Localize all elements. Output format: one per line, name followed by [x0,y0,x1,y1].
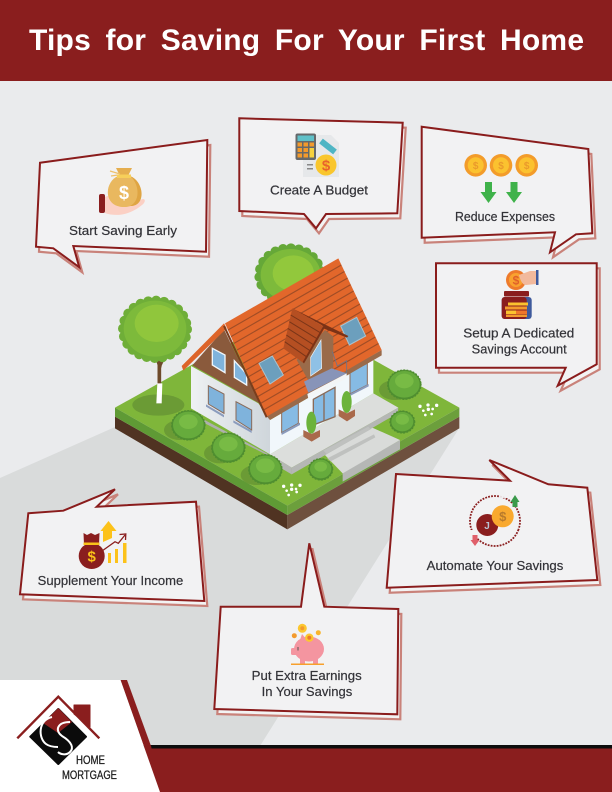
label [252,669,362,699]
label: Automate Your Savings [427,559,563,573]
icon: money bag and growth chart: $ [88,548,97,566]
ground block [115,312,459,529]
callout: start saving early [36,140,210,272]
icon: coins and down arrows [464,154,538,203]
house ground shadow [0,427,458,746]
icon: coins and down arrows: $ [498,161,504,172]
logo mark [17,697,99,764]
icon: money bag in hand: $ [119,183,129,203]
skylights [259,317,366,384]
callout: supplement your income [20,489,207,606]
wall windows [206,348,369,435]
icon: coins and down arrows: $ [473,161,479,172]
house illustration [115,248,459,529]
patio [198,393,398,474]
callout: reduce expenses [422,127,595,257]
icon: automation cycle: $ [499,509,507,524]
logo panel [0,680,160,792]
callout: dedicated savings account [436,263,600,391]
dormer [283,308,348,399]
callout: automate your savings [387,460,600,593]
icon: piggy bank [291,624,324,665]
bushes [164,371,420,485]
white flowers [282,403,438,496]
label: Supplement Your Income [38,574,183,588]
label: Put Extra Earnings [252,669,362,683]
house walls [191,360,373,454]
back tree [259,248,321,302]
footer band [120,680,612,792]
label: Reduce Expenses [455,210,555,224]
icon: money bag and growth chart [79,521,126,569]
label: Savings Account [472,342,567,356]
label: Setup A Dedicated [463,326,574,340]
icon: calculator and coin: $ [322,158,331,174]
gable [192,329,259,403]
main roof [182,258,382,420]
left tree [123,301,187,416]
steps [323,427,375,461]
icon: automation cycle: J [484,521,490,532]
title: Tips for Saving For Your First Home [29,24,584,57]
label: Start Saving Early [69,224,178,238]
logo text: HOME [76,753,105,767]
callout: put extra earnings [214,543,401,719]
planters [303,391,355,442]
label: In Your Savings [262,685,352,699]
icon: jar and coin [502,270,538,319]
icon: jar and coin: $ [513,274,520,288]
logo panel: MORTGAGE [62,768,117,782]
icon: calculator and coin [296,134,339,177]
callout: create a budget [239,118,406,233]
icon: money bag in hand [99,168,145,215]
icon: automation cycle [463,489,527,553]
header band [0,0,612,81]
label: Create A Budget [270,183,369,197]
label [463,326,574,356]
icon: coins and down arrows: $ [524,161,530,172]
